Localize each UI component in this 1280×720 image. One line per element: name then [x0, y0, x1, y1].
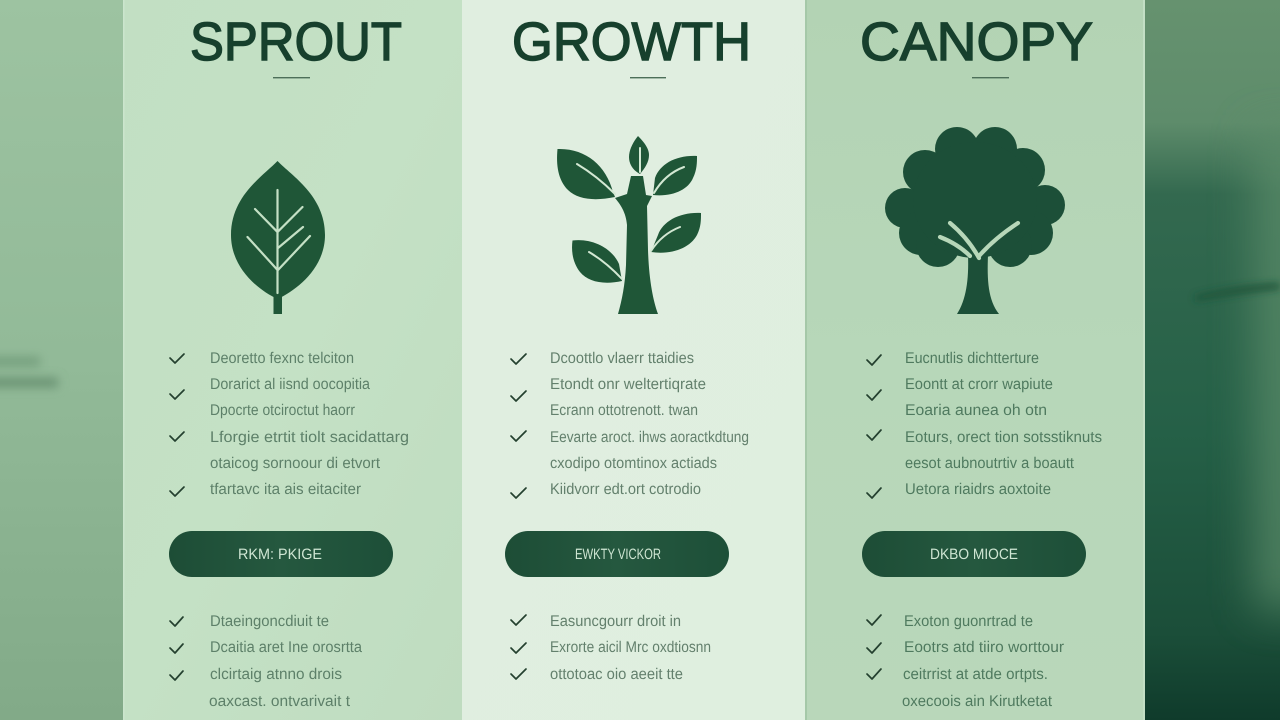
- check item: [511, 354, 526, 364]
- text line: Eucnutlis dichtterture: [905, 350, 1039, 367]
- check item: [867, 669, 881, 679]
- feature list: sprout lower: [170, 613, 362, 710]
- check item: [867, 488, 881, 498]
- text line: Dcoottlo vlaerr ttaidies: [550, 350, 694, 367]
- text line: Dtaeingoncdiuit te: [210, 613, 329, 630]
- button: sprout: [169, 531, 393, 577]
- text line: Ecrann ottotrenott. twan: [550, 402, 698, 419]
- background: left band: [0, 0, 124, 720]
- heading rule: sprout: [273, 77, 310, 78]
- panel: canopy: [807, 0, 1145, 720]
- text line: Eevarte aroct. ihws aoractkdtung: [550, 429, 749, 446]
- check item: [511, 391, 526, 401]
- check item: [867, 430, 881, 440]
- text line: Eootrs atd tiiro worttour: [904, 639, 1064, 656]
- check item: [511, 488, 526, 498]
- check item: [170, 390, 184, 399]
- text line: Dorarict al iisnd oocopitia: [210, 376, 370, 393]
- icon: sapling: [557, 136, 701, 314]
- panel: sprout: [123, 0, 462, 720]
- heading: sprout: SPROUT: [190, 12, 402, 72]
- text line: clcirtaig atnno drois: [210, 666, 342, 683]
- check item: [867, 355, 881, 365]
- feature list: canopy upper: [867, 350, 1102, 498]
- button: canopy: [862, 531, 1086, 577]
- text line: tfartavc ita ais eitaciter: [210, 481, 361, 498]
- text line: Kiidvorr edt.ort cotrodio: [550, 481, 701, 498]
- heading rule: canopy: [972, 77, 1009, 78]
- check item: [170, 671, 183, 680]
- check item: [867, 643, 881, 653]
- text line: Dcaitia aret Ine orosrtta: [210, 639, 362, 656]
- text line: otaicog sornoour di etvort: [210, 455, 381, 472]
- check item: [170, 487, 184, 496]
- check item: [511, 669, 526, 679]
- text line: Eoaria aunea oh otn: [905, 402, 1047, 419]
- check item: [170, 432, 184, 441]
- check item: [867, 615, 881, 625]
- text line: Exoton guonrtrad te: [904, 613, 1033, 630]
- text line: Etondt onr weltertiqrate: [550, 376, 706, 393]
- button: sprout: RKM: PKIGE: [238, 546, 322, 563]
- text line: Eoturs, orect tion sotsstiknuts: [905, 429, 1102, 446]
- heading: growth: GROWTH: [512, 12, 751, 72]
- heading: canopy: CANOPY: [860, 12, 1093, 72]
- feature list: growth lower: [511, 613, 711, 683]
- text line: Exrorte aicil Mrc oxdtiosnn: [550, 639, 711, 656]
- check item: [511, 615, 526, 625]
- text line: Eoontt at crorr wapiute: [905, 376, 1053, 393]
- text line: oxecoois ain Kirutketat: [902, 693, 1053, 710]
- heading rule: growth: [630, 77, 666, 78]
- check item: [867, 390, 881, 400]
- check item: [170, 644, 183, 653]
- icon: tree: [885, 127, 1065, 314]
- button: growth: EWKTY VICKOR: [575, 546, 661, 563]
- text line: oaxcast. ontvarivait t: [209, 693, 351, 710]
- text line: Dpocrte otciroctut haorr: [210, 402, 355, 419]
- text line: cxodipo otomtinox actiads: [550, 455, 717, 472]
- button: canopy: DKBO MIOCE: [930, 546, 1018, 563]
- check item: [170, 617, 183, 626]
- text line: eesot aubnoutrtiv a boautt: [905, 455, 1075, 472]
- text line: Deoretto fexnc telciton: [210, 350, 354, 367]
- text line: Easuncgourr droit in: [550, 613, 681, 630]
- check item: [511, 431, 526, 441]
- background: right band: [1145, 0, 1280, 720]
- panel: growth: [462, 0, 807, 720]
- text line: Uetora riaidrs aoxtoite: [905, 481, 1051, 498]
- check item: [511, 643, 526, 653]
- button: growth: [505, 531, 729, 577]
- text line: ceitrrist at atde ortpts.: [903, 666, 1048, 683]
- check item: [170, 354, 184, 363]
- feature list: sprout upper: [170, 350, 409, 498]
- feature list: canopy lower: [867, 613, 1064, 710]
- text line: Lforgie etrtit tiolt sacidattarg: [210, 429, 409, 446]
- text line: ottotoac oio aeeit tte: [550, 666, 683, 683]
- feature list: growth upper: [511, 350, 749, 498]
- icon: leaf: [231, 161, 325, 314]
